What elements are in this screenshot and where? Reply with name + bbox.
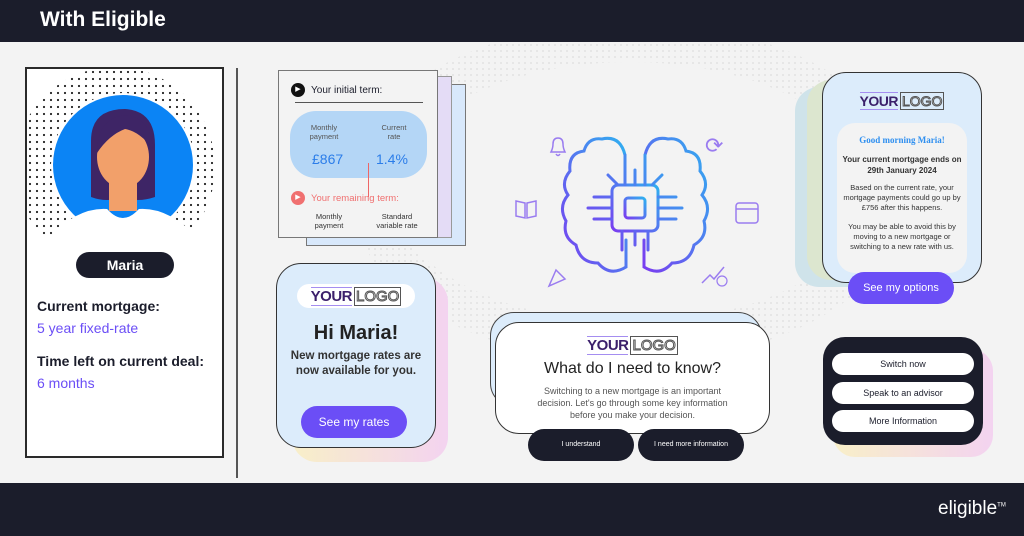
text: time left (37, 353, 204, 391)
name pill (76, 252, 174, 278)
logo: YOUR (311, 288, 352, 304)
message (837, 123, 967, 273)
icon: party (548, 268, 566, 288)
rate box: 1.4% (376, 151, 408, 167)
text: time left: Time left on current deal: (37, 353, 204, 369)
text: current mortgage: 5 year fixed-rate (37, 320, 138, 336)
panel: action menu: Speak to an advisor (863, 388, 943, 398)
icon: growth (702, 266, 728, 287)
background dot wave (368, 44, 850, 340)
icon: book (515, 200, 537, 219)
header bar (0, 0, 1024, 42)
divider line (236, 68, 238, 478)
rate box (290, 111, 427, 178)
button: See my options (863, 282, 939, 294)
panel: action menu: More Information (869, 416, 937, 426)
buttons (528, 429, 634, 461)
name pill: Maria (107, 257, 143, 273)
remaining term heading: ▶ (295, 194, 301, 201)
icon: bell (550, 137, 566, 156)
initial term heading: ▶ (295, 86, 301, 93)
panel: profile (25, 67, 224, 458)
logo: YOUR (587, 337, 628, 354)
panel: term card: Standard (382, 212, 412, 221)
panel: term card: Monthly (316, 212, 342, 221)
title: With Eligible (40, 8, 166, 31)
text: New mortgage rates are now available for you. (291, 350, 421, 377)
panel: notification card (795, 72, 982, 304)
panel: term card (278, 70, 466, 246)
logo (860, 92, 944, 110)
message: Based on the current rate, your mortgage payments could go up by £756 after this happens. (843, 183, 961, 212)
panel: term card: variable rate (376, 221, 418, 230)
buttons: I understand (562, 441, 600, 448)
icon: calendar (735, 202, 759, 224)
panel: action menu: Switch now (880, 359, 926, 369)
brain icon (560, 136, 710, 273)
remaining term heading: Your remaining term: (311, 192, 399, 204)
footer bar (0, 483, 1024, 536)
text: Switching to a new mortgage is an important decision. Let's go through some key information before you make your decision. (537, 386, 728, 420)
rate box: £867 (312, 151, 343, 167)
text: current mortgage: Current mortgage: (37, 298, 160, 314)
panel: action menu (823, 337, 993, 457)
rate box: Current (381, 123, 406, 132)
button (301, 406, 407, 438)
message: Good morning Maria! (859, 135, 945, 145)
rate box: payment (310, 132, 338, 141)
initial term heading (291, 83, 382, 97)
logo: LOGO (902, 93, 942, 109)
text: current mortgage (37, 298, 160, 336)
button: See my rates (319, 415, 389, 429)
message: Your current mortgage ends on 29th January 2024 (842, 155, 961, 175)
logo: LOGO (632, 337, 676, 354)
rate box: Monthly (311, 123, 337, 132)
panel: term card: payment (315, 221, 343, 230)
button (848, 272, 954, 304)
footer logo: eligibleTM (938, 498, 1006, 519)
heading: Hi Maria! (314, 322, 398, 344)
initial term heading: Your initial term: (311, 84, 382, 96)
avatar (28, 70, 214, 234)
logo: LOGO (356, 288, 399, 304)
message: You may be able to avoid this by moving to a new mortgage or switching to a new rate with us. (848, 222, 956, 251)
heading: What do I need to know? (544, 360, 721, 377)
logo (587, 336, 678, 355)
panel: dialog (490, 312, 770, 461)
rate box: rate (388, 132, 400, 141)
remaining term heading (291, 191, 399, 205)
logo (297, 284, 415, 308)
icon: refresh: ⟳ (705, 133, 723, 158)
logo: YOUR (860, 93, 898, 109)
panel: dialog: I need more information (654, 441, 728, 448)
panel: Hi Maria card (276, 263, 448, 462)
text: time left: 6 months (37, 375, 95, 391)
